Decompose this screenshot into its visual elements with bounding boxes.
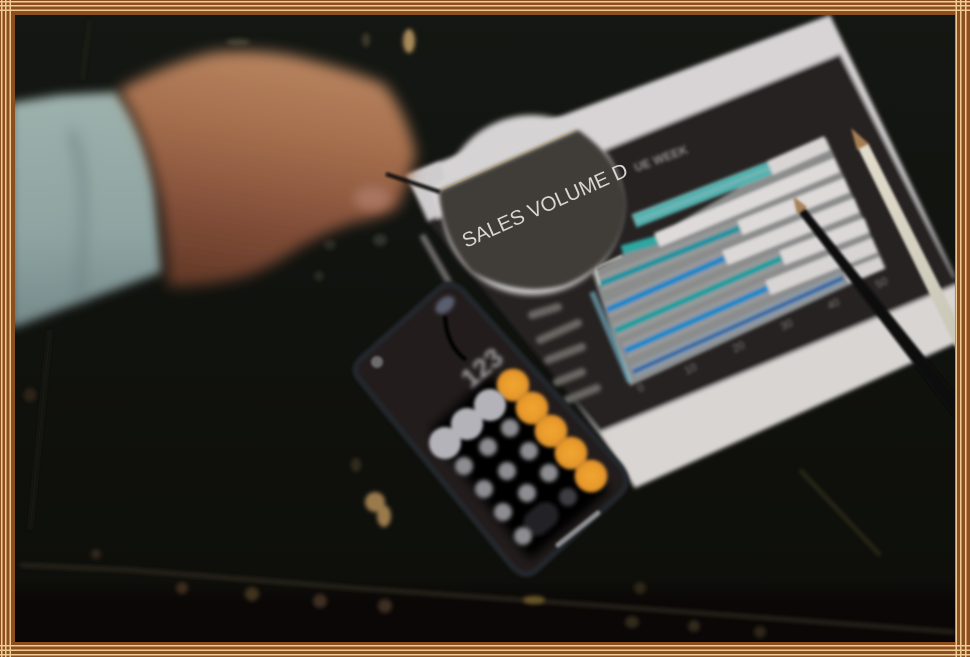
camera dot <box>371 356 383 368</box>
glasses handle held in fingers <box>386 174 440 192</box>
back of hand <box>118 51 416 286</box>
blurred category labels <box>532 307 597 400</box>
magnifier frame at lens <box>408 162 445 222</box>
black lower screen <box>430 375 610 560</box>
white pencil <box>851 128 958 352</box>
number keys <box>455 419 577 545</box>
magnified title: SALES VOLUME D <box>459 159 631 253</box>
magnifying glass <box>408 115 690 295</box>
hand <box>118 51 416 286</box>
finger highlight <box>354 186 390 210</box>
zero key <box>518 497 564 541</box>
left edge highlight <box>592 292 630 382</box>
row 2 <box>622 165 837 250</box>
earbud cable on screen <box>445 316 466 360</box>
chart corner highlight <box>595 256 622 285</box>
row 4 <box>607 205 857 310</box>
sales report paper <box>404 15 958 488</box>
blurred axis values: 30 <box>779 317 795 333</box>
row 6 <box>625 245 875 351</box>
lens reflection <box>432 293 458 317</box>
row 1 <box>634 143 827 225</box>
dark header and chart panel <box>428 54 958 432</box>
lens white paper <box>442 115 622 295</box>
black pencil <box>793 196 958 422</box>
chart plot background <box>592 138 886 386</box>
bar chart <box>592 138 886 386</box>
blurred axis values: 0 <box>635 382 646 395</box>
worn paint spots on desk <box>24 29 766 638</box>
phone body <box>355 284 626 574</box>
paper sheet <box>404 15 958 488</box>
row 5 <box>615 225 867 331</box>
calculator display: 123 <box>455 342 509 394</box>
blurred axis values: 40 <box>826 296 842 312</box>
home indicator <box>558 513 598 545</box>
row 3 <box>600 185 847 284</box>
gold paper edge <box>440 130 576 190</box>
row 7 <box>633 263 882 372</box>
orange operator keys <box>496 368 608 492</box>
grey function keys <box>429 389 506 459</box>
lens dark panel <box>439 130 627 289</box>
blurred axis values: 50 <box>874 275 890 291</box>
blurred subtitle: UE WEEK <box>632 142 690 175</box>
blurred axis values: 20 <box>731 339 747 355</box>
sleeve <box>10 92 162 328</box>
bottom white strip <box>600 284 958 488</box>
magnifier stem <box>422 235 450 284</box>
blurred axis values <box>635 275 890 395</box>
blurred axis values: 10 <box>683 361 699 377</box>
phone calculator <box>355 284 626 574</box>
